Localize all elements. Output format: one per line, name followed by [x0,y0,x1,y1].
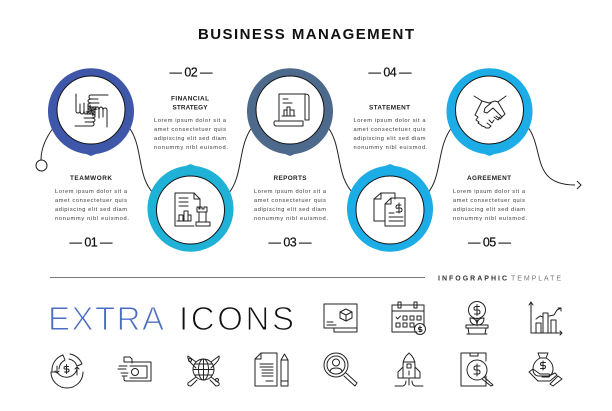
text block: reports: amet consectetuer quis [254,198,326,204]
text block: statement: Lorem ipsum dolor sit a [354,118,426,124]
icon: search person [324,353,357,386]
text block: financial strategy [154,96,228,151]
text block: statement: adipiscing elit sed diam [354,136,426,142]
heading: extra icons: ICONS [179,300,294,337]
text block: agreement: Lorem ipsum dolor sit a [453,189,526,195]
label: number 02: — 02 — [170,66,213,80]
icon: document search dollar [461,353,493,386]
icon: rocket [395,353,423,386]
text block: agreement: AGREEMENT [467,175,511,182]
step 5: agreement circle [446,68,532,156]
icon: globe network [188,356,219,386]
icon: handshake [474,96,506,128]
text block: agreement: amet consectetuer quis [453,198,525,204]
text block: statement: STATEMENT [369,104,410,112]
text block: teamwork: TEAMWORK [70,175,112,182]
label: infographic template: TEMPLATE [511,276,561,282]
text block: statement: nonummy nibl euismod. [354,145,428,151]
text block: reports: REPORTS [274,175,307,182]
text block: financial strategy: amet consectetuer quis [154,127,226,133]
label: number 05: — 05 — [468,236,512,250]
icon: dollar cycle [51,354,83,388]
connector path [36,126,581,194]
text block: reports [254,175,328,222]
text block: statement: amet consectetuer quis [354,127,426,133]
step 1: teamwork circle [48,68,134,156]
step 4: statement circle [347,164,433,252]
step 2: financial strategy circle [148,164,234,252]
label: number 03: — 03 — [268,236,312,250]
text block: teamwork: adipiscing elit sed diam [55,207,127,213]
text block: financial strategy: Lorem ipsum dolor sit a [154,118,227,124]
icon: report scroll with chart [274,94,309,126]
text block: reports: nonummy nibl euismod. [254,216,328,222]
text block: teamwork: nonummy nibl euismod. [55,216,129,222]
text block: teamwork [55,175,129,222]
icon: stacked invoices [374,193,405,226]
icon: document and chess rook [175,193,210,226]
text block: financial strategy: nonummy nibl euismod. [154,145,228,151]
text block: teamwork: amet consectetuer quis [55,198,127,204]
text block: agreement: adipiscing elit sed diam [453,207,525,213]
icon: document and pencil [255,353,288,386]
text block: financial strategy: FINANCIAL [171,96,209,102]
text block: agreement [453,175,527,222]
text block: financial strategy: STRATEGY [172,104,208,112]
title: BUSINESS MANAGEMENT [198,26,414,43]
step 3: reports circle [247,68,333,156]
text block: agreement: nonummy nibl euismod. [453,216,527,222]
icon: plant with coin [466,302,488,334]
label: infographic template [438,276,561,282]
icon: growth chart [529,302,562,335]
text block: financial strategy: adipiscing elit sed diam [154,136,226,142]
icon: teamwork hands [75,94,108,127]
icon: box on screen [324,304,357,332]
heading: extra icons: EXTRA [48,300,164,337]
icon: calendar with dollar [392,302,426,334]
label: infographic template: INFOGRAPHIC [438,276,507,282]
text block: reports: Lorem ipsum dolor sit a [254,189,327,195]
icon: money bag in hand [529,353,562,386]
text block: reports: adipiscing elit sed diam [254,207,326,213]
label: number 04: — 04 — [368,66,412,80]
icon: flying cash [118,357,151,381]
label: number 01: — 01 — [70,236,113,250]
heading: extra icons [48,300,294,337]
text block: teamwork: Lorem ipsum dolor sit a [55,189,128,195]
text block: statement [354,104,428,151]
